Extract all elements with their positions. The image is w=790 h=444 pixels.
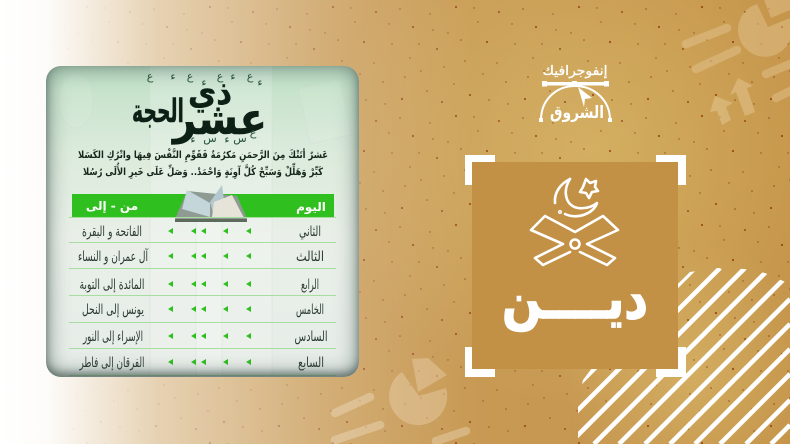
row 3: المائدة إلى التوبة [80,277,144,293]
title ornament marks: ع [187,70,194,83]
title calligraphy: الحجة [132,92,184,130]
row 1 [82,224,321,240]
row 4 [82,302,324,318]
faint kaaba door ornament [59,66,351,377]
row 5: السادس [294,329,328,345]
title ornament marks: ء [190,133,196,146]
row 2: آل عمران و النساء [78,248,149,265]
row 4: يونس إلى النحل [82,302,144,318]
row 3 [80,277,319,293]
title ornament marks: س [203,132,217,145]
row 2 [78,248,324,265]
row 2: الثالث [296,249,324,265]
title calligraphy [132,73,267,145]
diagonal white stripes [578,268,790,444]
decorative faint pills, top right [686,28,790,98]
title ornament marks [147,70,263,146]
logo: Infographic Al-Shorouk: الشروق [550,103,604,123]
table rows [69,218,336,376]
title calligraphy: ذي [188,73,232,113]
green direction arrows [168,228,251,365]
row 6 [79,355,324,371]
title ornament marks: ع [147,70,154,83]
panel: Dhul Hijjah Quran reading schedule [46,66,359,377]
title ornament marks: ء [201,76,207,89]
title ornament marks: س [233,132,247,145]
row 6: الفرقان إلى فاطر [79,355,144,371]
title ornament marks: ع [250,126,257,139]
panel: category square [472,162,678,369]
decorative faint pie chart, bottom [389,358,447,425]
corner brackets [465,155,686,377]
row 5: الإسراء إلى النور [82,329,143,345]
row 1: الفاتحة و البقرة [82,224,142,240]
decorative faint pills, bottom [335,397,466,441]
row 4: الخامس [296,302,324,318]
table header bar [72,194,334,218]
row 6: السابع [298,355,324,371]
icon: crescent and star over open Quran [531,179,618,265]
title ornament marks: ع [217,70,224,83]
logo: Infographic Al-Shorouk [539,64,612,123]
title ornament marks: ء [224,133,230,146]
row 1: الثاني [299,224,321,240]
title ornament marks: ء [257,76,263,89]
category label: ديــــن [502,267,648,332]
table header bar: اليوم [296,200,326,215]
decorative faint pie chart, top right [738,0,790,57]
decorative faint up arrows [710,78,755,125]
table header bar: من - إلى [86,199,138,213]
row 3: الرابع [301,277,319,293]
logo: Infographic Al-Shorouk: إنفوجرافيك [542,64,608,79]
poem lines [78,148,328,180]
row 5 [82,329,328,345]
row dividers [69,218,336,376]
icon: open book [175,185,247,222]
title calligraphy: عشر [171,94,267,145]
title ornament marks: ع [247,70,254,83]
title ornament marks: ء [170,70,176,83]
title ornament marks: ء [230,70,236,83]
